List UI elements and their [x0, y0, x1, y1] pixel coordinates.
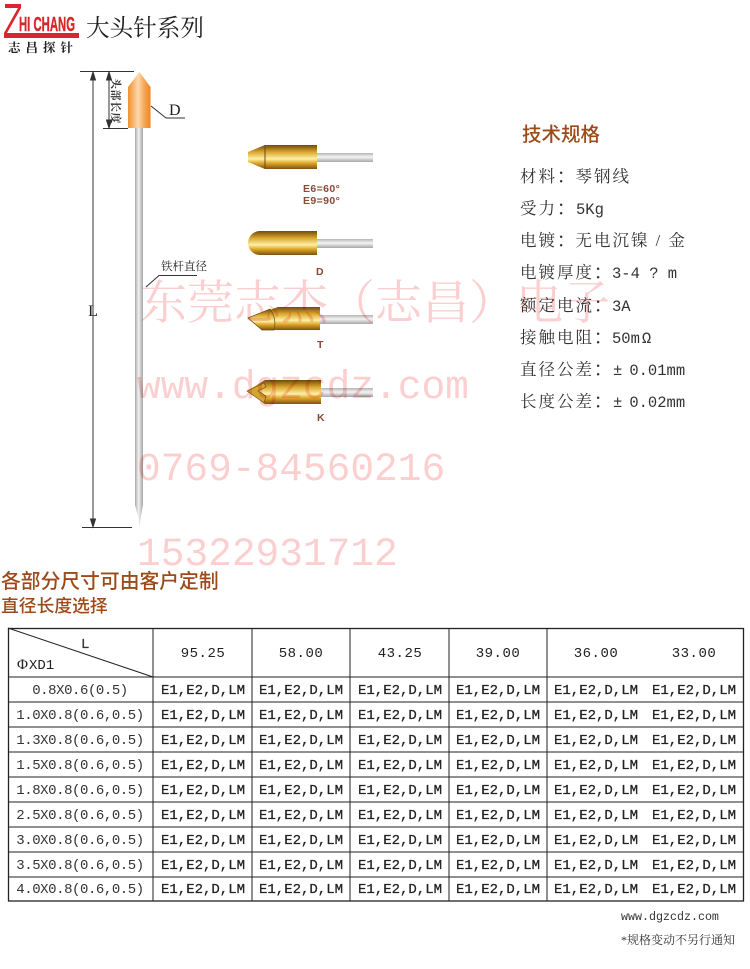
label: head length: 头部长度 [109, 78, 123, 124]
table header: 43.25 [378, 646, 422, 662]
table row 7: E1,E2,D,LM [456, 833, 540, 849]
table row 1: 0.8X0.6(0.5) [32, 683, 128, 699]
table row 5 [16, 783, 736, 799]
table row 4: E1,E2,D,LM [161, 758, 245, 774]
dimension: total length L [80, 72, 134, 528]
table row 9: E1,E2,D,LM [456, 882, 540, 898]
table row 1 [32, 683, 736, 699]
table row 7: 3.0X0.8(0.6,0.5) [16, 833, 144, 849]
table row 7: E1,E2,D,LM [161, 833, 245, 849]
table row 2: E1,E2,D,LM [259, 708, 343, 724]
pin variant: T [248, 307, 373, 351]
table header: 58.00 [279, 646, 323, 662]
pin variant: E [248, 145, 373, 207]
table header: ΦXD1 [17, 657, 54, 674]
table row 7: E1,E2,D,LM [652, 833, 736, 849]
table row 5: E1,E2,D,LM [554, 783, 638, 799]
table header: 39.00 [476, 646, 520, 662]
table row 9: E1,E2,D,LM [259, 882, 343, 898]
table row 1: E1,E2,D,LM [652, 683, 736, 699]
table row 1: E1,E2,D,LM [259, 683, 343, 699]
label: D: D [316, 266, 324, 278]
table row 4: 1.5X0.8(0.6,0.5) [16, 758, 144, 774]
table header [17, 637, 716, 674]
table row 6: E1,E2,D,LM [554, 808, 638, 824]
spec: force: 5Kg [576, 201, 604, 219]
spec: rated current: 3A [612, 298, 631, 316]
table row 4 [16, 758, 736, 774]
table row 7: E1,E2,D,LM [554, 833, 638, 849]
label: T: T [317, 339, 324, 351]
callout: D [151, 102, 185, 119]
table row 9: E1,E2,D,LM [161, 882, 245, 898]
table row 6: 2.5X0.8(0.6,0.5) [16, 808, 144, 824]
footer note: *规格变动不另行通知 [621, 932, 735, 947]
spec: diameter tolerance: 0.01mm [629, 362, 685, 380]
table row 2: E1,E2,D,LM [652, 708, 736, 724]
table row 2: E1,E2,D,LM [358, 708, 442, 724]
callout: shaft diameter: 铁杆直径 [161, 259, 207, 273]
table row 2: E1,E2,D,LM [554, 708, 638, 724]
table row 4: E1,E2,D,LM [554, 758, 638, 774]
table header: L [81, 637, 89, 653]
heading: custom sizes: 各部分尺寸可由客户定制 [1, 571, 219, 593]
spec: plating: 电镀：无电沉镍 / 金 [520, 227, 687, 251]
label: K: K [317, 412, 325, 424]
table row 4: E1,E2,D,LM [652, 758, 736, 774]
table row 9: E1,E2,D,LM [554, 882, 638, 898]
table row 5: 1.8X0.8(0.6,0.5) [16, 783, 144, 799]
table row 9: 4.0X0.8(0.6,0.5) [16, 882, 144, 898]
table row 7 [16, 833, 736, 849]
table row 6: E1,E2,D,LM [161, 808, 245, 824]
table row 8 [16, 858, 736, 874]
table row 6: E1,E2,D,LM [652, 808, 736, 824]
spec: contact resistance: 接触电阻： [520, 324, 612, 348]
table row 6 [16, 808, 736, 824]
spec: length tolerance: ± [613, 394, 622, 412]
table row 3: E1,E2,D,LM [554, 733, 638, 749]
spec: contact resistance: 50m [612, 330, 640, 348]
logo: company name: HI CHANG [19, 14, 75, 36]
callout: D: D [169, 102, 181, 119]
table row 6: E1,E2,D,LM [358, 808, 442, 824]
spec: length tolerance: 0.02mm [629, 394, 685, 412]
table row 8: E1,E2,D,LM [161, 858, 245, 874]
table row 8: E1,E2,D,LM [358, 858, 442, 874]
spec: length tolerance: 长度公差： [520, 388, 612, 412]
spec: rated current: 额定电流： [520, 292, 612, 316]
table row 4: E1,E2,D,LM [259, 758, 343, 774]
spec: contact resistance: Ω [642, 330, 651, 348]
table row 6: E1,E2,D,LM [456, 808, 540, 824]
spec: diameter tolerance: 直径公差： [520, 356, 612, 380]
table row 8: E1,E2,D,LM [259, 858, 343, 874]
table grid [8, 628, 744, 901]
table row 3: E1,E2,D,LM [358, 733, 442, 749]
table row 5: E1,E2,D,LM [456, 783, 540, 799]
dimension: head length [103, 72, 128, 128]
pin shaft [135, 126, 143, 526]
table row 4: E1,E2,D,LM [456, 758, 540, 774]
table row 6: E1,E2,D,LM [259, 808, 343, 824]
table row 1: E1,E2,D,LM [161, 683, 245, 699]
table row 5: E1,E2,D,LM [161, 783, 245, 799]
spec: material: 材料：琴钢线 [520, 163, 631, 187]
table row 2: 1.0X0.8(0.6,0.5) [16, 708, 144, 724]
logo [4, 4, 79, 55]
heading: diameter length selection: 直径长度选择 [1, 596, 108, 616]
table row 1: E1,E2,D,LM [358, 683, 442, 699]
table row 8: E1,E2,D,LM [456, 858, 540, 874]
title: 大头针系列 [86, 15, 204, 42]
spec heading: 技术规格 [522, 124, 601, 146]
table row 8: E1,E2,D,LM [652, 858, 736, 874]
pin variant: K [247, 380, 373, 424]
specifications panel [520, 124, 687, 412]
table row 5: E1,E2,D,LM [259, 783, 343, 799]
diagram: main pin with dimensions [80, 72, 207, 528]
label: E6/E9: E6=60° [303, 183, 340, 195]
pin variant: D [248, 231, 373, 278]
spec: plating thickness: 电镀厚度： [520, 259, 612, 283]
table row 3: E1,E2,D,LM [259, 733, 343, 749]
spec: plating thickness: 3-4 ? m [612, 265, 677, 283]
table row 2: E1,E2,D,LM [456, 708, 540, 724]
table row 9: E1,E2,D,LM [358, 882, 442, 898]
table row 2 [16, 708, 736, 724]
watermark [137, 278, 610, 577]
table row 1: E1,E2,D,LM [456, 683, 540, 699]
table header: 36.00 [574, 646, 618, 662]
table row 7: E1,E2,D,LM [358, 833, 442, 849]
footer website: www.dgzcdz.com [621, 910, 719, 924]
table row 3: E1,E2,D,LM [652, 733, 736, 749]
table row 9 [16, 882, 736, 898]
logo: Z mark [4, 4, 79, 38]
table header: 33.00 [672, 646, 716, 662]
table row 7: E1,E2,D,LM [259, 833, 343, 849]
spec: force: 受力： [520, 195, 576, 219]
label: E9: E9=90° [303, 195, 340, 207]
table row 3: E1,E2,D,LM [161, 733, 245, 749]
table row 8: 3.5X0.8(0.6,0.5) [16, 858, 144, 874]
table row 5: E1,E2,D,LM [652, 783, 736, 799]
spec: diameter tolerance: ± [613, 362, 622, 380]
pin head [128, 72, 150, 128]
table row 3: 1.3X0.8(0.6,0.5) [16, 733, 144, 749]
table row 5: E1,E2,D,LM [358, 783, 442, 799]
logo: Chinese name: 志昌探针 [8, 40, 78, 55]
callout: shaft diameter [146, 259, 207, 287]
label: L: L [88, 303, 98, 320]
table row 8: E1,E2,D,LM [554, 858, 638, 874]
table [8, 628, 744, 901]
table row 1: E1,E2,D,LM [554, 683, 638, 699]
table row 3 [16, 733, 736, 749]
table row 9: E1,E2,D,LM [652, 882, 736, 898]
table row 3: E1,E2,D,LM [456, 733, 540, 749]
watermark: mobile: 15322931712 [137, 532, 398, 577]
table row 2: E1,E2,D,LM [161, 708, 245, 724]
watermark: phone: 0769-84560216 [137, 447, 445, 492]
watermark: company: 东莞志杰（志昌）电子 [140, 278, 610, 330]
table row 4: E1,E2,D,LM [358, 758, 442, 774]
watermark: website: www.dgzcdz.com [137, 365, 469, 410]
table header: 95.25 [181, 646, 225, 662]
